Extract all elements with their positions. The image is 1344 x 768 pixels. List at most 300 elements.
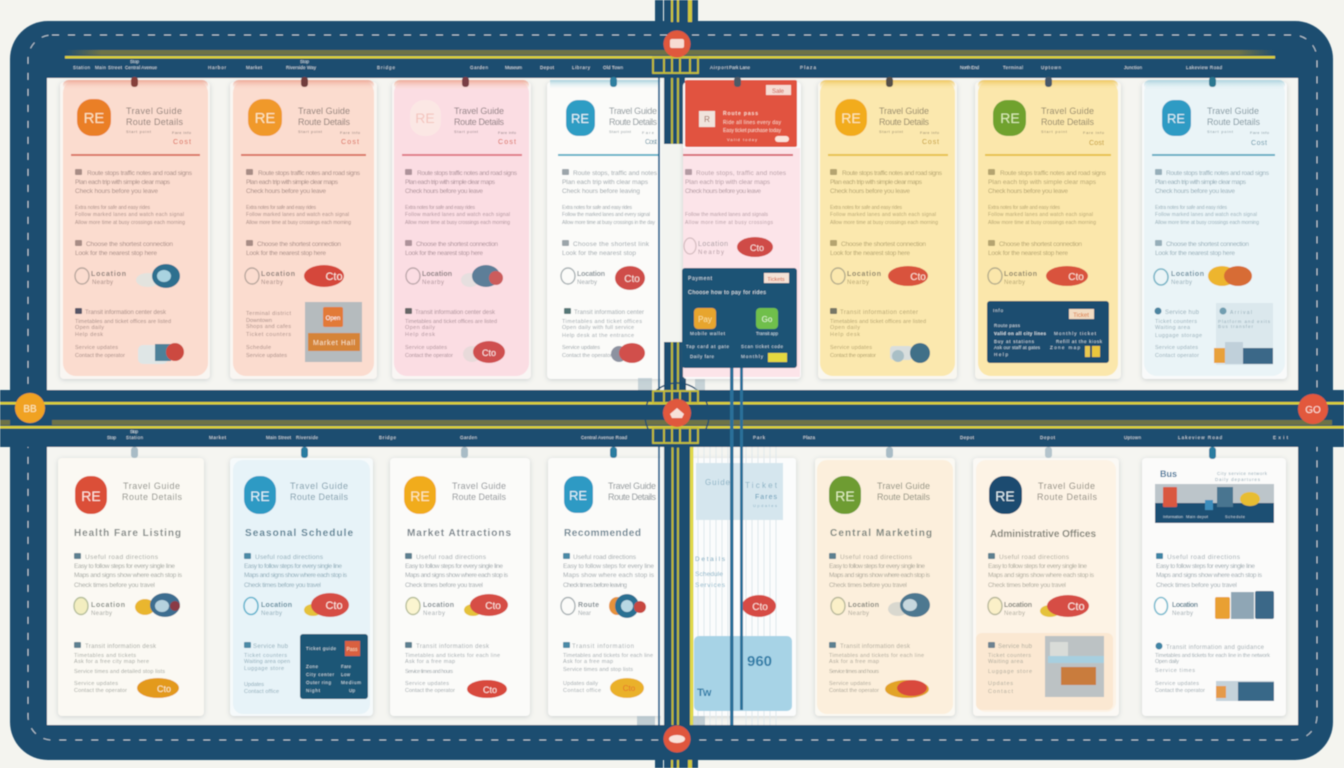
road labels: lower lane: Riverside — [296, 435, 318, 440]
text block: Route stops, traffic and notes — [573, 170, 658, 177]
lower text block and illustration: Contact the operator — [830, 353, 876, 359]
rating and illustration — [684, 237, 773, 257]
lower text and illustration: Transit information desk — [840, 644, 911, 650]
payment details: Mobile wallet — [690, 331, 726, 336]
icon: navy badge: RE — [995, 488, 1015, 504]
payment details: Daily fare — [690, 354, 714, 359]
lower text and illustration: Transit information desk — [85, 644, 157, 650]
red header: Sale — [772, 89, 785, 95]
icon: amber badge: RE — [410, 488, 430, 504]
rating and illustration — [831, 593, 930, 617]
card heading — [290, 481, 348, 502]
text block: Allow more time at busy crossings each morning — [75, 220, 185, 226]
road labels: top lane: Museum — [505, 65, 522, 70]
card heading: Start point — [298, 129, 323, 134]
rating and illustration: Cto — [325, 271, 343, 283]
dark info card with app icons: Payment — [688, 276, 713, 282]
road labels: top lane: Uptown — [1041, 65, 1061, 70]
text block — [988, 169, 1107, 257]
text block: Check hours before you leave — [75, 188, 158, 195]
dark info card: Buy at stations — [994, 339, 1035, 344]
rating and illustration: Location — [1004, 271, 1037, 278]
road labels: lower lane: Garden — [460, 435, 477, 440]
text block: Check times before you travel — [405, 582, 484, 589]
payment details: Monthly — [741, 354, 764, 359]
road labels: lower lane: Depot — [1040, 435, 1056, 440]
blue fare panel — [694, 636, 792, 711]
lower text block and photo: Market Hall — [313, 340, 355, 347]
road labels: top lane: Bridge — [377, 65, 395, 70]
dark info card: City center — [306, 672, 334, 677]
faded text block: Schedule — [695, 571, 723, 578]
icon: navy badge — [989, 476, 1022, 514]
card heading: Travel Guide — [126, 106, 182, 116]
banner illustration: Information — [1163, 514, 1183, 519]
lower text block: Luggage store — [244, 666, 284, 672]
lower text block and illustration: Contact the operator — [562, 353, 612, 359]
icon: red badge — [75, 476, 107, 514]
road labels: top lane: Riverside Way — [286, 65, 317, 70]
lower text block and illustration: Timetables and ticket offices are listed — [75, 319, 171, 325]
rating and illustration: Cto — [485, 601, 501, 612]
text block — [988, 553, 1095, 589]
dark info card: Valid on all city lines — [994, 331, 1046, 336]
card heading: Travel Guide — [452, 481, 506, 491]
faded text block: Services — [695, 582, 726, 589]
text block: Useful road directions — [85, 554, 159, 561]
text block: Route stops traffic notes and road signs — [87, 170, 193, 177]
text block: Route stops traffic notes and road signs — [258, 170, 361, 177]
card: top 7 yellow — [975, 77, 1121, 379]
card heading: Travel Guide — [454, 106, 504, 116]
card heading: Fare — [642, 130, 655, 135]
road labels: top lane: Old Town — [603, 65, 623, 70]
lower text and illustration: Ask for a free map — [405, 659, 455, 665]
text block: Allow more time at busy crossings each morning — [405, 220, 510, 226]
card heading: Cost — [645, 139, 657, 146]
lower text block and illustration — [75, 308, 184, 364]
icon: orange badge: RE — [84, 110, 104, 127]
card heading: Start point — [126, 129, 152, 134]
text block: Route stops traffic notes and road signs — [842, 170, 943, 177]
road labels: top lane: Airport — [710, 65, 729, 70]
card heading: Travel Guide — [1038, 481, 1095, 491]
card heading — [454, 106, 517, 146]
card: top 5 pink with red header — [683, 77, 801, 379]
card heading: Start point — [879, 129, 904, 134]
card heading: Start point — [454, 129, 479, 134]
text block: Check hours before you leave — [246, 188, 326, 195]
text block: Choose the shortest connection — [841, 241, 926, 248]
text block: Check hours before you leave — [1155, 188, 1235, 195]
red header: Valid today — [727, 137, 757, 142]
text block: Easy to follow steps for every single line — [244, 563, 342, 570]
text block: Check hours before leaving — [562, 188, 640, 195]
lower text and illustration: Service times and hours — [829, 669, 879, 675]
dark info card with app icons: Choose how to pay for rides — [688, 290, 766, 296]
icon: green badge — [829, 476, 861, 514]
road labels: top lane: Stop — [130, 59, 139, 64]
card heading — [1041, 106, 1105, 147]
lower text block and illustration: Timetables and ticket offices are listed — [830, 319, 926, 325]
text block — [562, 169, 658, 257]
text block: Allow more time at busy crossings each morning — [1155, 220, 1259, 226]
text block: Plan each trip with simple clear maps — [246, 179, 339, 186]
road labels: top lane: Market — [246, 65, 263, 70]
icon: amber badge — [835, 99, 867, 136]
text block: Plan each trip with simple clear maps — [1155, 179, 1247, 186]
road labels: lower lane: Uptown — [1124, 435, 1141, 440]
card: bottom 8 white — [1142, 447, 1286, 716]
text block: Choose the shortest connection — [416, 241, 498, 248]
lower text and illustration: Service times and stop lists — [563, 667, 633, 673]
lower text block and illustration: Timetables and ticket offices are listed — [405, 319, 497, 325]
lower text and illustration: Service times — [1155, 668, 1195, 674]
lower panel with photo: Waiting area — [988, 659, 1024, 665]
text block: Choose the shortest connection — [257, 241, 341, 248]
card heading: Fare info — [340, 130, 361, 135]
lower text and illustration: Contact the operator — [1155, 688, 1205, 694]
text block: Extra notes for safe and easy rides — [1155, 205, 1228, 211]
lower text and photo: Arrival — [1230, 310, 1252, 316]
road labels: top lane: Junction — [1124, 65, 1142, 70]
card: bottom 7 cream — [973, 447, 1119, 716]
rating and illustration: Nearby — [1172, 611, 1193, 617]
lower text and illustration: Service updates — [1155, 681, 1199, 687]
dark info card: Ticket — [1073, 313, 1089, 319]
lower text block and illustration: Help desk at the entrance — [562, 333, 634, 339]
badge: left orange: BB — [23, 404, 37, 415]
dark info card: Up — [349, 688, 355, 693]
lower text block and illustration: Help desk — [405, 332, 435, 338]
lower text and illustration: Contact office — [563, 688, 601, 694]
icon: pale badge: RE — [415, 110, 435, 126]
lower text and illustration: Ask for a free city map here — [74, 659, 149, 665]
road labels: lower lane: Stop — [107, 435, 116, 440]
rating and illustration — [74, 593, 180, 617]
card heading: Start point — [1207, 129, 1234, 134]
card heading: Travel Guide — [123, 481, 180, 491]
dark info card: Refill at the kiosk — [1056, 339, 1103, 344]
card: top 1 peach — [60, 77, 210, 379]
lower text and illustration: Ask for a free map — [829, 659, 879, 665]
card heading: Route Details — [122, 492, 182, 502]
icon: blue badge — [564, 476, 593, 513]
rating and illustration: Nearby — [1004, 280, 1025, 286]
rating and illustration: Cto — [910, 272, 926, 283]
banner illustration: Daily departures — [1215, 477, 1261, 482]
lower text block and illustration — [562, 308, 645, 363]
dark info card with app icons — [682, 268, 797, 368]
lower text and photo: Service updates — [1155, 345, 1198, 351]
lower text block and photo: Service updates — [246, 353, 287, 359]
dark info card: Ask our staff at gates — [994, 345, 1041, 350]
icon: blue badge: RE — [250, 488, 270, 504]
text block: Maps show where each stop is — [563, 572, 655, 579]
icon: amber badge: RE — [841, 110, 861, 126]
card heading: Route Details — [1041, 117, 1094, 127]
payment details: Scan ticket code — [741, 344, 783, 349]
text block: Allow more time at busy crossings in the day — [562, 220, 656, 226]
lower text and photo: Waiting area — [1155, 325, 1191, 331]
lower panel with photo: Service hub — [998, 644, 1033, 650]
card heading: Route Details — [290, 492, 348, 502]
card: top 8 pale blue — [1142, 77, 1287, 379]
road labels: lower lane: Lakeview Road — [1178, 435, 1222, 440]
text block — [405, 553, 509, 589]
text block: Extra notes for safe and easy rides — [405, 205, 476, 211]
rating and illustration — [988, 595, 1089, 617]
rating and illustration: Cto — [624, 274, 640, 285]
card heading: Travel Guide — [290, 481, 348, 491]
rating and illustration: Location — [848, 602, 879, 609]
middle cross road — [0, 390, 1344, 447]
card heading — [609, 106, 658, 146]
icon: green app: Go — [762, 315, 773, 324]
lower text block and photo: Schedule — [246, 345, 271, 351]
lower text block and illustration — [405, 308, 505, 363]
card heading: Route Details — [879, 117, 930, 127]
card: top 4 white — [547, 77, 667, 379]
rating and illustration: Location — [577, 271, 605, 278]
text block: Extra notes for safe and easy rides — [830, 205, 902, 211]
text block: Easy to follow steps for every single line — [988, 563, 1087, 570]
rating and illustration: Location — [847, 271, 881, 278]
text block — [244, 553, 348, 589]
road labels: top lane: Harbor — [208, 65, 226, 70]
card heading — [608, 481, 656, 502]
road labels: top lane: Main Street — [95, 65, 123, 70]
card heading: Route Details — [452, 492, 506, 502]
text block: Easy to follow steps for every line — [563, 563, 654, 570]
road labels: lower lane: Stop — [130, 429, 138, 434]
card: top 3 pink — [392, 77, 531, 379]
rating and illustration — [1154, 266, 1252, 286]
banner illustration: Schedule — [1225, 514, 1246, 519]
faded header text — [705, 478, 778, 508]
lower text block and illustration: Timetables and ticket offices — [562, 319, 642, 325]
lower text block and photo: Open — [326, 316, 340, 322]
lower panel with photo: Contact — [988, 689, 1013, 695]
text block: Check hours before you leave — [988, 188, 1068, 195]
text block: Plan each trip with simple clear maps — [830, 179, 923, 186]
card: bottom 4 white — [548, 447, 668, 716]
dark info card: Info — [993, 308, 1003, 313]
lower text and illustration: Service updates — [74, 681, 118, 687]
card: top 2 peach — [230, 77, 377, 379]
banner illustration: Bus — [1160, 469, 1177, 479]
lower text and illustration — [563, 642, 653, 698]
lower text and illustration: Contact the operator — [74, 688, 127, 694]
faded header text: Guide — [705, 478, 731, 487]
road labels: lower lane: Central Avenue Road — [581, 435, 627, 440]
road labels: lower lane — [107, 429, 1289, 440]
rating and illustration — [561, 594, 646, 618]
card heading: Fare info — [920, 130, 940, 135]
rating and illustration — [406, 265, 503, 287]
text block: Useful road directions — [840, 554, 913, 561]
icon: blue badge — [244, 476, 276, 514]
badge: right red — [1298, 394, 1328, 424]
card heading: Cost — [341, 139, 359, 146]
lower text block and illustration: Help desk — [75, 332, 103, 338]
road labels: lower lane: Exit — [1273, 435, 1289, 440]
text block: Extra notes for safe and easy rides — [562, 205, 632, 211]
road labels: top lane: Depot — [540, 65, 555, 70]
rating and illustration — [988, 266, 1088, 286]
text block: Follow marked lanes and watch each signal — [246, 212, 349, 218]
lower text and illustration: Transit information desk — [416, 644, 490, 650]
red header: Easy ticket purchase today — [723, 128, 782, 134]
rating and illustration: Location — [1172, 602, 1198, 609]
card heading: Cost — [498, 139, 516, 146]
icon: yellow app: Pay — [698, 315, 712, 324]
card heading: Route Details — [1037, 492, 1098, 502]
rating and illustration: Cto — [750, 243, 764, 253]
payment details: Tap card at gate — [686, 344, 729, 349]
section title: Central Marketing — [830, 528, 932, 539]
lower text block and photo: Downtown — [246, 318, 272, 324]
lower text block and illustration: Transit information center desk — [85, 310, 167, 316]
rating and illustration — [75, 264, 180, 288]
lower text block and illustration: Contact the operator — [75, 353, 125, 359]
card heading: Fare info — [498, 130, 517, 135]
text block: Easy to follow steps for every single line — [405, 563, 503, 570]
icon: green badge: RE — [1000, 110, 1020, 126]
lower text block and photo: Ticket counters — [246, 332, 291, 338]
card: bottom 1 cream — [58, 447, 204, 716]
card heading: Travel Guide — [609, 106, 657, 116]
card heading — [1037, 481, 1098, 502]
lower text and illustration: Timetables and tickets for each line — [405, 653, 500, 659]
blue fare panel: Tw — [697, 687, 712, 699]
rating and illustration: Nearby — [423, 611, 445, 617]
lower text block and illustration: Service updates — [75, 345, 118, 351]
badge: top center — [664, 30, 690, 58]
card: top 6 yellow — [818, 77, 957, 379]
lower text block and illustration: Service updates — [830, 345, 872, 351]
card heading — [122, 481, 182, 502]
rating and illustration: Cto — [1067, 601, 1085, 613]
badge: bottom center — [664, 726, 690, 752]
lower text block and illustration: Open daily — [830, 325, 860, 331]
central road — [637, 0, 709, 768]
text block — [405, 169, 518, 257]
text block: Follow marked lanes and watch each signal — [1155, 212, 1257, 218]
lower text and illustration: Timetables and tickets for each line — [829, 653, 924, 659]
rating and illustration: Nearby — [1004, 611, 1025, 617]
card heading: Route Details — [454, 117, 504, 127]
road labels: lower lane: Station — [126, 435, 143, 440]
text block — [830, 169, 943, 257]
card heading: Fare info — [1250, 130, 1270, 135]
card heading: Travel Guide — [1041, 106, 1094, 116]
red header: Ride all lines every day — [723, 120, 782, 126]
banner illustration — [1155, 469, 1274, 523]
text block: Plan each trip with clear maps — [685, 179, 771, 186]
rating and illustration: Nearby — [91, 611, 112, 617]
text block: Check hours before you leave — [405, 188, 483, 195]
text block: Maps and signs show where each stop is — [405, 572, 509, 579]
lower panel with photo: Updates — [988, 681, 1013, 687]
lower text block and illustration: Open daily with full service — [562, 325, 634, 331]
text block: Look for the nearest stop here — [75, 250, 157, 257]
text block: Extra notes for safe and easy rides — [246, 205, 316, 211]
dark info card — [987, 301, 1109, 363]
text block: Look for the nearest stop here — [1155, 250, 1235, 257]
text block — [246, 169, 361, 257]
text block: Check times before leaving — [563, 582, 627, 589]
lower text block and illustration: Help desk — [830, 332, 860, 338]
rating and illustration — [1154, 591, 1274, 619]
section title: Recommended — [564, 528, 641, 539]
lower text block and illustration: Contact the operator — [405, 353, 453, 359]
lower text and illustration: Contact the operator — [829, 688, 879, 694]
text block: Look for the nearest stop here — [246, 250, 326, 257]
text block: Plan each trip with clear maps — [562, 179, 649, 186]
text block — [829, 553, 931, 589]
lower text block and illustration: Transit information center desk — [415, 310, 496, 316]
red route badge — [742, 595, 776, 617]
text block: Route stops traffic notes and road signs — [1000, 170, 1107, 177]
icon: blue badge: RE — [571, 111, 589, 126]
lower text and photo: Luggage storage — [1155, 333, 1202, 339]
card heading — [126, 106, 192, 146]
road labels: top lane: Station — [73, 65, 90, 70]
card heading: Route Details — [298, 117, 350, 127]
section title: Market Attractions — [407, 528, 511, 539]
text block: Useful road directions — [1167, 554, 1241, 561]
text block: Choose the shortest connection — [999, 241, 1082, 248]
lower text block and photo — [246, 302, 362, 362]
blue guide lines — [730, 367, 743, 725]
icon: red badge: RE — [81, 488, 101, 504]
text block: Choose the shortest link — [573, 241, 650, 248]
faded header text: Ticket — [745, 481, 778, 490]
card heading: Travel Guide — [1207, 106, 1259, 116]
icon: green badge: RE — [835, 488, 855, 504]
lower panel with photo — [976, 633, 1113, 710]
rating and illustration: Nearby — [698, 250, 724, 256]
text block: Maps and signs show where each stop is — [988, 572, 1095, 579]
text block — [1156, 553, 1263, 589]
rating and illustration: Nearby — [261, 611, 282, 617]
rating and illustration: Nearby — [422, 280, 444, 286]
card heading: Cost — [173, 139, 191, 146]
payment details — [686, 331, 783, 359]
lower text and illustration: Timetables and tickets for each line in the network — [1155, 653, 1270, 659]
road labels: top lane: Garden — [470, 65, 488, 70]
lower text and illustration: Cto — [483, 685, 497, 695]
lower text block — [244, 642, 290, 695]
card: bottom 6 cream — [815, 447, 955, 716]
rating and illustration: Location — [91, 271, 126, 278]
lower text and illustration: Service times and detailed stop lists — [74, 669, 165, 675]
rating and illustration — [244, 593, 349, 617]
road labels: top lane: Plaza — [800, 65, 816, 70]
dark info card: Zone map — [1050, 345, 1080, 350]
text block: Plan each trip with simple clear maps — [988, 179, 1097, 186]
icon: green badge — [993, 100, 1026, 136]
card heading: Fare info — [172, 130, 192, 135]
text block: Check times before you travel — [988, 582, 1067, 589]
text block: Allow more time at busy crossings — [685, 220, 774, 226]
text block: Route stops, traffic and notes — [696, 170, 787, 177]
lower panel with photo: Ticket counters — [988, 653, 1031, 659]
text block — [563, 553, 655, 589]
text block: Look for the nearest stop here — [830, 250, 910, 257]
dark info card: Outer ring — [306, 680, 331, 685]
